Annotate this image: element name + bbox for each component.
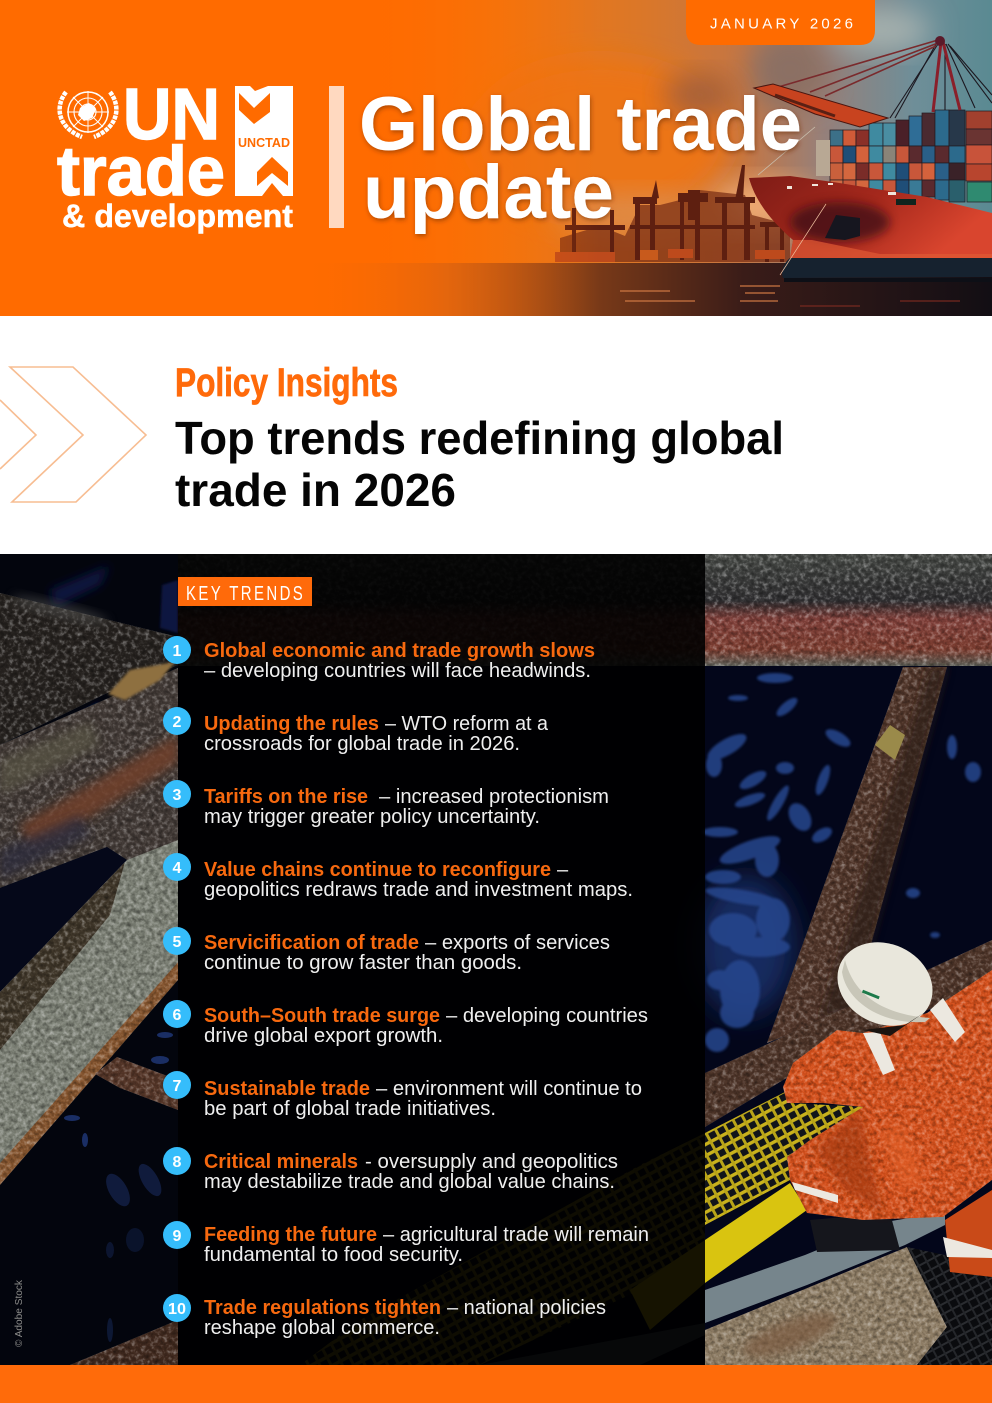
key trends label: KEY TRENDS [186, 582, 305, 605]
trend 7 [163, 1071, 642, 1120]
date tab: JANUARY 2026 [710, 16, 853, 32]
trend 5: – exports of services [425, 932, 610, 954]
boot [810, 1213, 900, 1252]
trend 5: continue to grow faster than goods. [204, 952, 522, 974]
photo credit: © Adobe Stock [14, 1279, 25, 1347]
trend 5: 5 [173, 934, 182, 951]
dark deck [907, 1247, 992, 1365]
trend 7: be part of global trade initiatives. [204, 1098, 496, 1120]
trend 3: Tariffs on the rise [204, 786, 368, 808]
trend 2: – WTO reform at a [385, 713, 549, 735]
UNCTAD mark [235, 86, 293, 196]
trend 8: Critical minerals [204, 1151, 358, 1173]
logo: UN trade & development [57, 75, 293, 234]
logo: UN trade & development: UN [123, 75, 220, 155]
trend 6: 6 [173, 1007, 182, 1024]
trend 1: – developing countries will face headwinds. [204, 660, 591, 682]
water ripples [695, 673, 981, 1052]
container stacks [830, 110, 992, 202]
trend 1: 1 [173, 643, 182, 660]
date tab [686, 0, 875, 45]
water [0, 263, 992, 316]
trend 2: Updating the rules [204, 713, 379, 735]
icon: UN emblem [60, 91, 116, 137]
trend 1 [163, 636, 595, 682]
trend 3: 3 [173, 787, 182, 804]
photo top band [178, 554, 992, 666]
trend 6: South–South trade surge [204, 1005, 440, 1027]
divider bar [329, 86, 344, 228]
key trends label [178, 577, 312, 606]
heading: trade in 2026 [175, 464, 456, 516]
logo: UN trade & development: trade [57, 132, 225, 210]
ship superstructure [816, 140, 830, 176]
horizontal pipe [705, 940, 992, 1127]
hard hat [824, 927, 946, 1041]
yellow grating [705, 1092, 880, 1225]
trend 5: Servicification of trade [204, 932, 419, 954]
container ship hull [749, 176, 992, 258]
trend 4: 4 [173, 860, 182, 877]
trend 7: 7 [173, 1078, 182, 1095]
trend 2: crossroads for global trade in 2026. [204, 733, 520, 755]
trend 10: reshape global commerce. [204, 1317, 440, 1339]
title: Global trade [359, 82, 802, 167]
trend 7: Sustainable trade [204, 1078, 370, 1100]
dark text panel [178, 554, 705, 1365]
trend 8: - oversupply and geopolitics [365, 1151, 618, 1173]
trend 4: geopolitics redraws trade and investment maps. [204, 879, 633, 901]
trend 10: – national policies [447, 1297, 606, 1319]
orange fade mask [300, 0, 600, 316]
worker orange suit [783, 970, 992, 1220]
trend 6: drive global export growth. [204, 1025, 443, 1047]
logo: UN trade & development: & development [62, 198, 293, 234]
trend 10 [163, 1294, 606, 1339]
rusty slab [705, 1247, 947, 1365]
gantry crane [754, 36, 992, 127]
yellow beam [705, 1183, 807, 1283]
trend 8: may destabilize trade and global value chains. [204, 1171, 615, 1193]
trend 9: Feeding the future [204, 1224, 377, 1246]
reflective stripes [792, 998, 992, 1258]
trend 4: – [557, 859, 569, 881]
trend 8 [163, 1147, 618, 1193]
trend 9: fundamental to food security. [204, 1244, 463, 1266]
UNCTAD mark: UNCTAD [238, 135, 290, 150]
trend 9: – agricultural trade will remain [383, 1224, 649, 1246]
icon: chevron outlines [0, 367, 146, 502]
heading [175, 412, 784, 516]
trend 8: 8 [173, 1154, 182, 1171]
title: update [363, 150, 614, 235]
left photo: rusty pipes [0, 554, 705, 1365]
grey walkway [705, 1212, 945, 1323]
trend 3: – increased protectionism [379, 786, 609, 808]
trend 7: – environment will continue to [376, 1078, 642, 1100]
bottom band [0, 1365, 992, 1403]
trend 4 [163, 853, 633, 901]
trend 1: Global economic and trade growth slows [204, 640, 595, 662]
trend 5 [163, 927, 610, 974]
trend 3: may trigger greater policy uncertainty. [204, 806, 540, 828]
trend 4: Value chains continue to reconfigure [204, 859, 551, 881]
header banner with port photo [0, 0, 992, 316]
trend 10: 10 [168, 1301, 186, 1318]
trend 10: Trade regulations tighten [204, 1297, 441, 1319]
heading: Top trends redefining global [175, 412, 784, 464]
trend 2: 2 [173, 714, 182, 731]
trend 3 [163, 780, 609, 828]
trend 9 [163, 1221, 649, 1266]
trend 2 [163, 707, 549, 755]
trend 9: 9 [173, 1228, 182, 1245]
trend 6 [163, 1000, 648, 1047]
background port cranes [560, 190, 790, 262]
title [359, 82, 802, 235]
right photo: worker on deck [178, 554, 992, 1365]
section label: Policy Insights: Policy Insights [175, 361, 398, 405]
trend 6: – developing countries [446, 1005, 648, 1027]
vertical pipe [767, 667, 947, 1043]
